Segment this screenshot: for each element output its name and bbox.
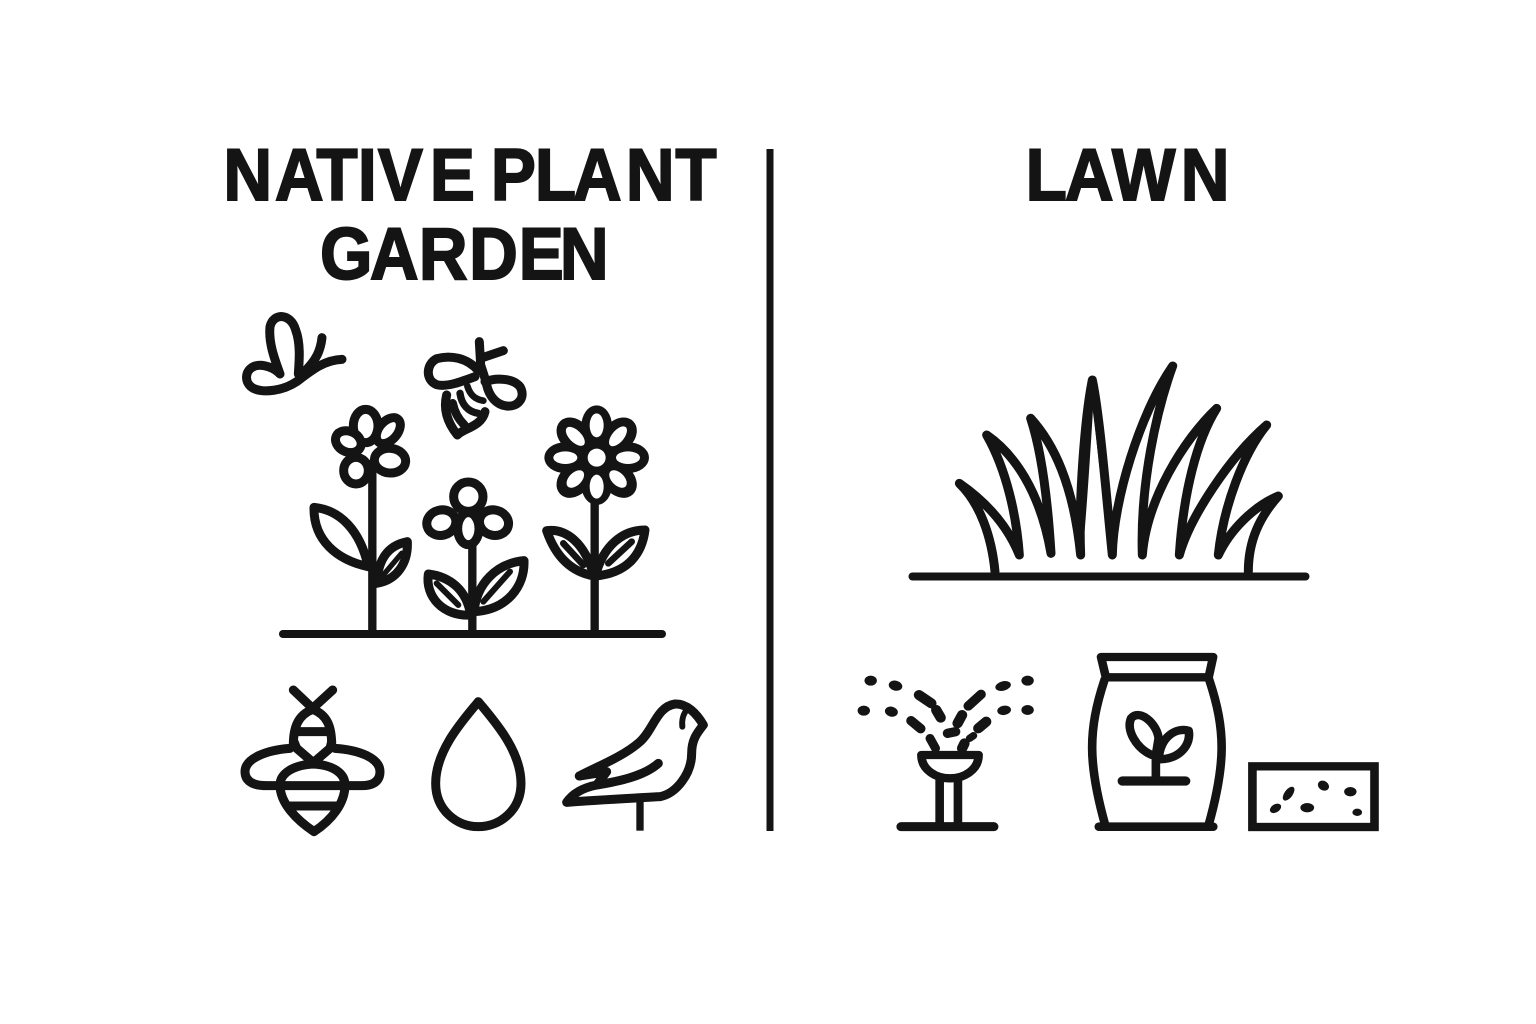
icon: fertilizer bag [1092,657,1222,827]
icon: flying bee [428,342,522,435]
icon: center flower [424,482,524,633]
title: native plant garden: GARDEN [320,213,609,295]
icon: butterfly [247,317,342,391]
icon: bird [567,704,703,831]
title: native plant garden [224,134,717,295]
icon: water drop [436,702,521,827]
title: lawn: LAWN [1026,134,1229,216]
icon: left flower [314,409,407,633]
icon: right flower [544,405,649,633]
title: native plant garden: NATIVE PLANT [224,134,717,216]
icon: soil box [1252,766,1374,827]
ground line: garden [283,630,662,638]
icon: bee [245,690,380,832]
center divider [766,149,774,831]
icon: grass [959,366,1278,572]
ground line: lawn [912,572,1306,580]
icon: sprinkler [858,676,1034,827]
